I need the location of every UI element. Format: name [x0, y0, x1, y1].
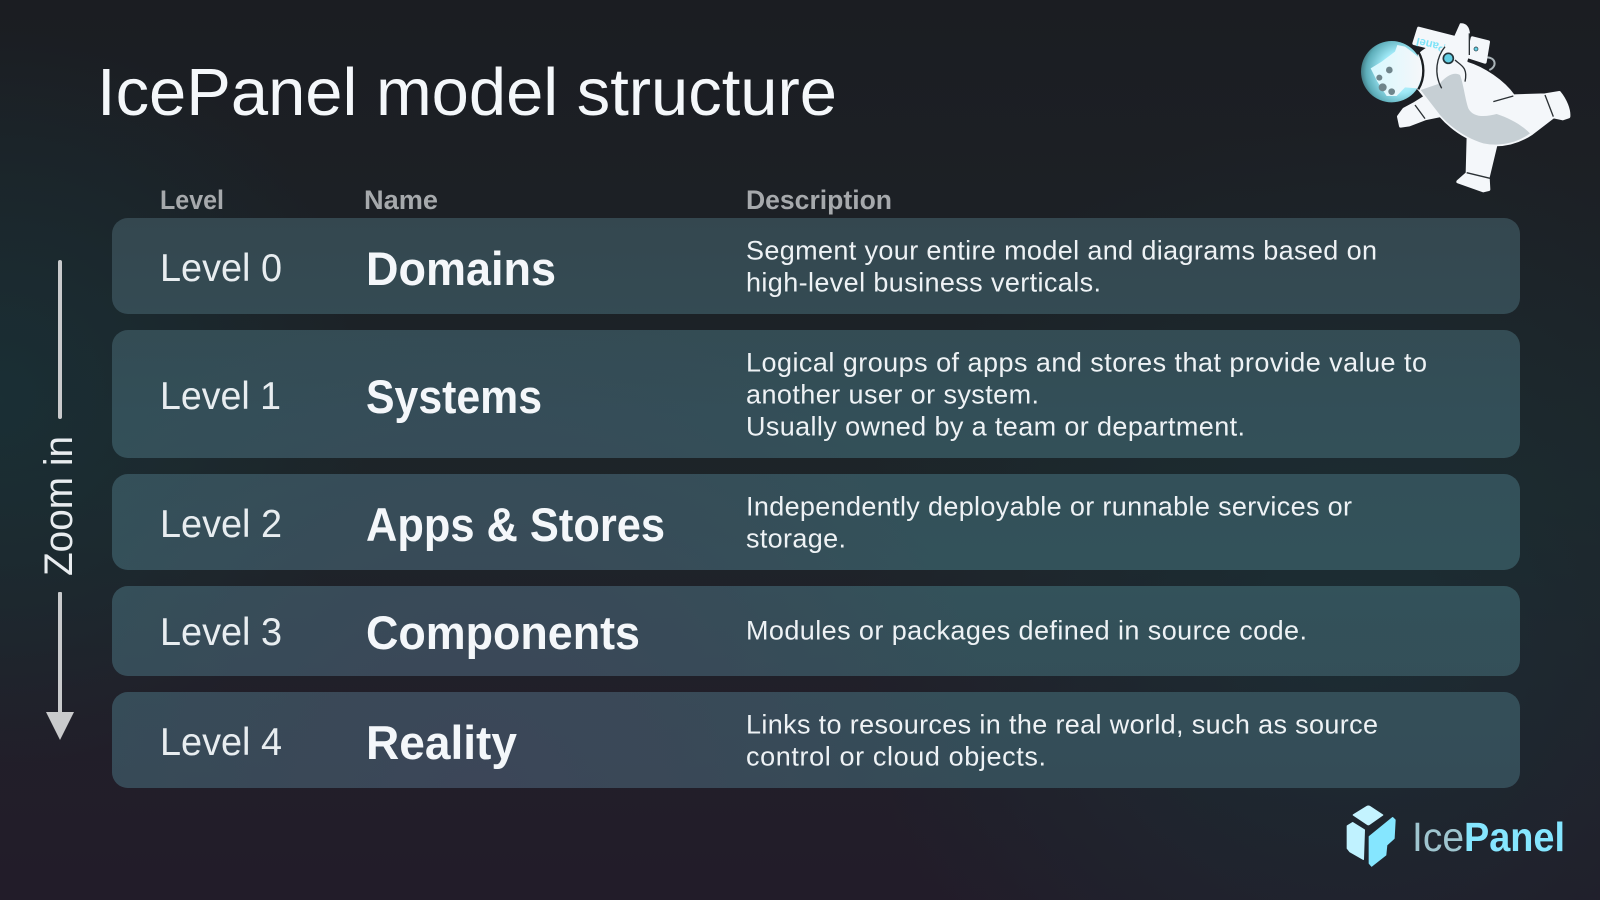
panel: level 4 reality: Level 4	[160, 721, 282, 764]
column headers	[160, 185, 892, 215]
panel: level 2 apps and stores: Apps & Stores	[366, 498, 665, 551]
panel: level 1 systems: Usually owned by a team or department.	[746, 412, 1245, 442]
panel: level 0 domains: Domains	[366, 242, 556, 295]
panel: level 1 systems: Systems	[366, 370, 542, 423]
arrow: zoom in: Zoom in	[37, 436, 81, 576]
icon: cube	[1347, 806, 1395, 866]
panel: level 0 domains: high-level business verticals.	[746, 268, 1101, 298]
panel: level 1 systems: Level 1	[160, 375, 281, 418]
column headers: Name	[364, 185, 438, 215]
panel: level 4 reality	[112, 692, 1520, 788]
icon: astronaut polar bear	[1361, 23, 1569, 191]
panel: level 2 apps and stores: Independently deployable or runnable services or	[746, 492, 1352, 522]
logo: IcePanel	[1347, 806, 1565, 866]
title: IcePanel model structure	[97, 55, 837, 130]
panel: level 2 apps and stores	[112, 474, 1520, 570]
panel: level 4 reality: Links to resources in the real world, such as source	[746, 710, 1378, 740]
panel: level 0 domains: Segment your entire model and diagrams based on	[746, 236, 1377, 266]
panel: level 3 components: Modules or packages defined in source code.	[746, 616, 1307, 646]
panel: level 3 components	[112, 586, 1520, 676]
panel: level 2 apps and stores: storage.	[746, 524, 846, 554]
panel: level 3 components: Level 3	[160, 611, 282, 654]
panel: level 3 components: Components	[366, 606, 640, 659]
panel: level 0 domains: Level 0	[160, 247, 282, 290]
logo: IcePanel: Ice	[1412, 814, 1464, 860]
column headers: Description	[746, 185, 892, 215]
column headers: Level	[160, 185, 224, 215]
panel: level 1 systems: another user or system.	[746, 380, 1039, 410]
panel: level 2 apps and stores: Level 2	[160, 503, 282, 546]
panel: level 4 reality: control or cloud objects.	[746, 742, 1046, 772]
panel: level 1 systems: Logical groups of apps and stores that provide value to	[746, 348, 1427, 378]
arrow: zoom in	[37, 260, 81, 740]
logo: IcePanel: Panel	[1464, 814, 1565, 860]
panel: level 0 domains	[112, 218, 1520, 314]
panel: level 1 systems	[112, 330, 1520, 458]
icon: astronaut polar bear: Panel	[1415, 35, 1447, 54]
panel: level 4 reality: Reality	[366, 716, 517, 769]
